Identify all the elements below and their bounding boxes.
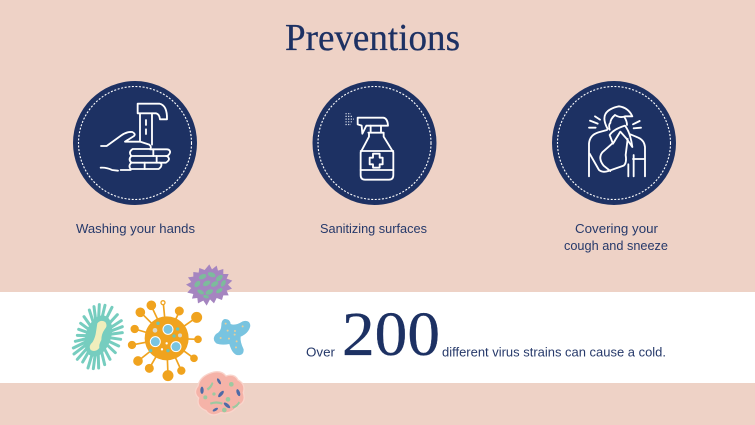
title: Preventions — [285, 17, 460, 59]
icon: washing hands — [73, 81, 197, 205]
illustration: viruses — [73, 264, 250, 415]
statistic callout: 200 — [342, 301, 440, 369]
statistic callout: Over — [306, 344, 336, 360]
virus: pink — [195, 372, 244, 415]
virus: blue — [214, 319, 250, 355]
label: covering cough — [564, 221, 668, 253]
virus: green — [73, 305, 122, 369]
virus: purple — [186, 264, 232, 306]
label: covering cough: cough and sneeze — [564, 238, 668, 253]
statistic callout: different virus strains can cause a cold. — [442, 344, 666, 360]
icon: covering cough — [552, 81, 676, 205]
label: covering cough: Covering your — [575, 221, 659, 236]
statistic callout — [306, 301, 666, 369]
label: washing hands: Washing your hands — [76, 221, 196, 236]
virus: orange — [129, 301, 201, 380]
label: sanitizing surfaces: Sanitizing surfaces — [320, 221, 427, 236]
icon: spray bottle — [312, 81, 436, 205]
